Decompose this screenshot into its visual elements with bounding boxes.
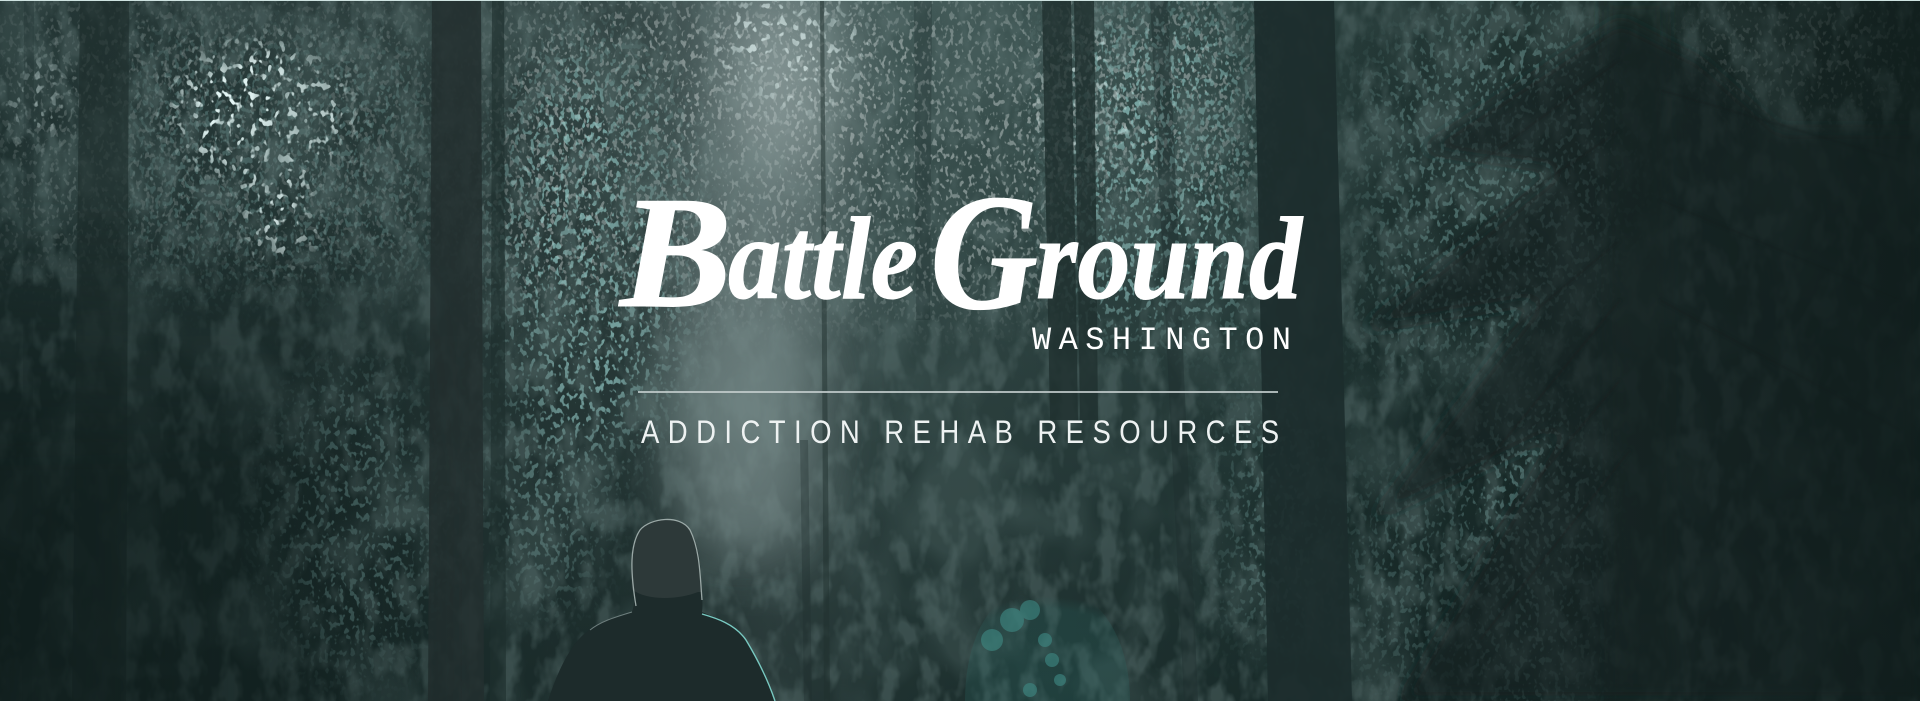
title: Battle Ground — [618, 160, 1304, 344]
title: Battle Ground: B — [618, 163, 732, 341]
title: Battle Ground: attle — [728, 193, 918, 324]
tagline: Addiction Rehab Resources: ADDICTION REHAB RESOURCES — [641, 415, 1279, 451]
title: Battle Ground: round — [1036, 193, 1304, 324]
hood — [631, 519, 702, 598]
figure rim light — [590, 519, 775, 701]
subtitle: Washington: WASHINGTON — [1032, 322, 1291, 359]
title: Battle Ground: G — [930, 160, 1038, 344]
figure: hooded person — [548, 519, 775, 701]
divider line — [638, 391, 1278, 393]
background: dark conifer on the right — [1360, 20, 1920, 701]
background: light ray and haze — [670, 0, 850, 560]
background: lens flare and lit branch — [965, 585, 1130, 701]
top edge highlight — [0, 0, 1920, 1]
figure body — [548, 519, 775, 701]
